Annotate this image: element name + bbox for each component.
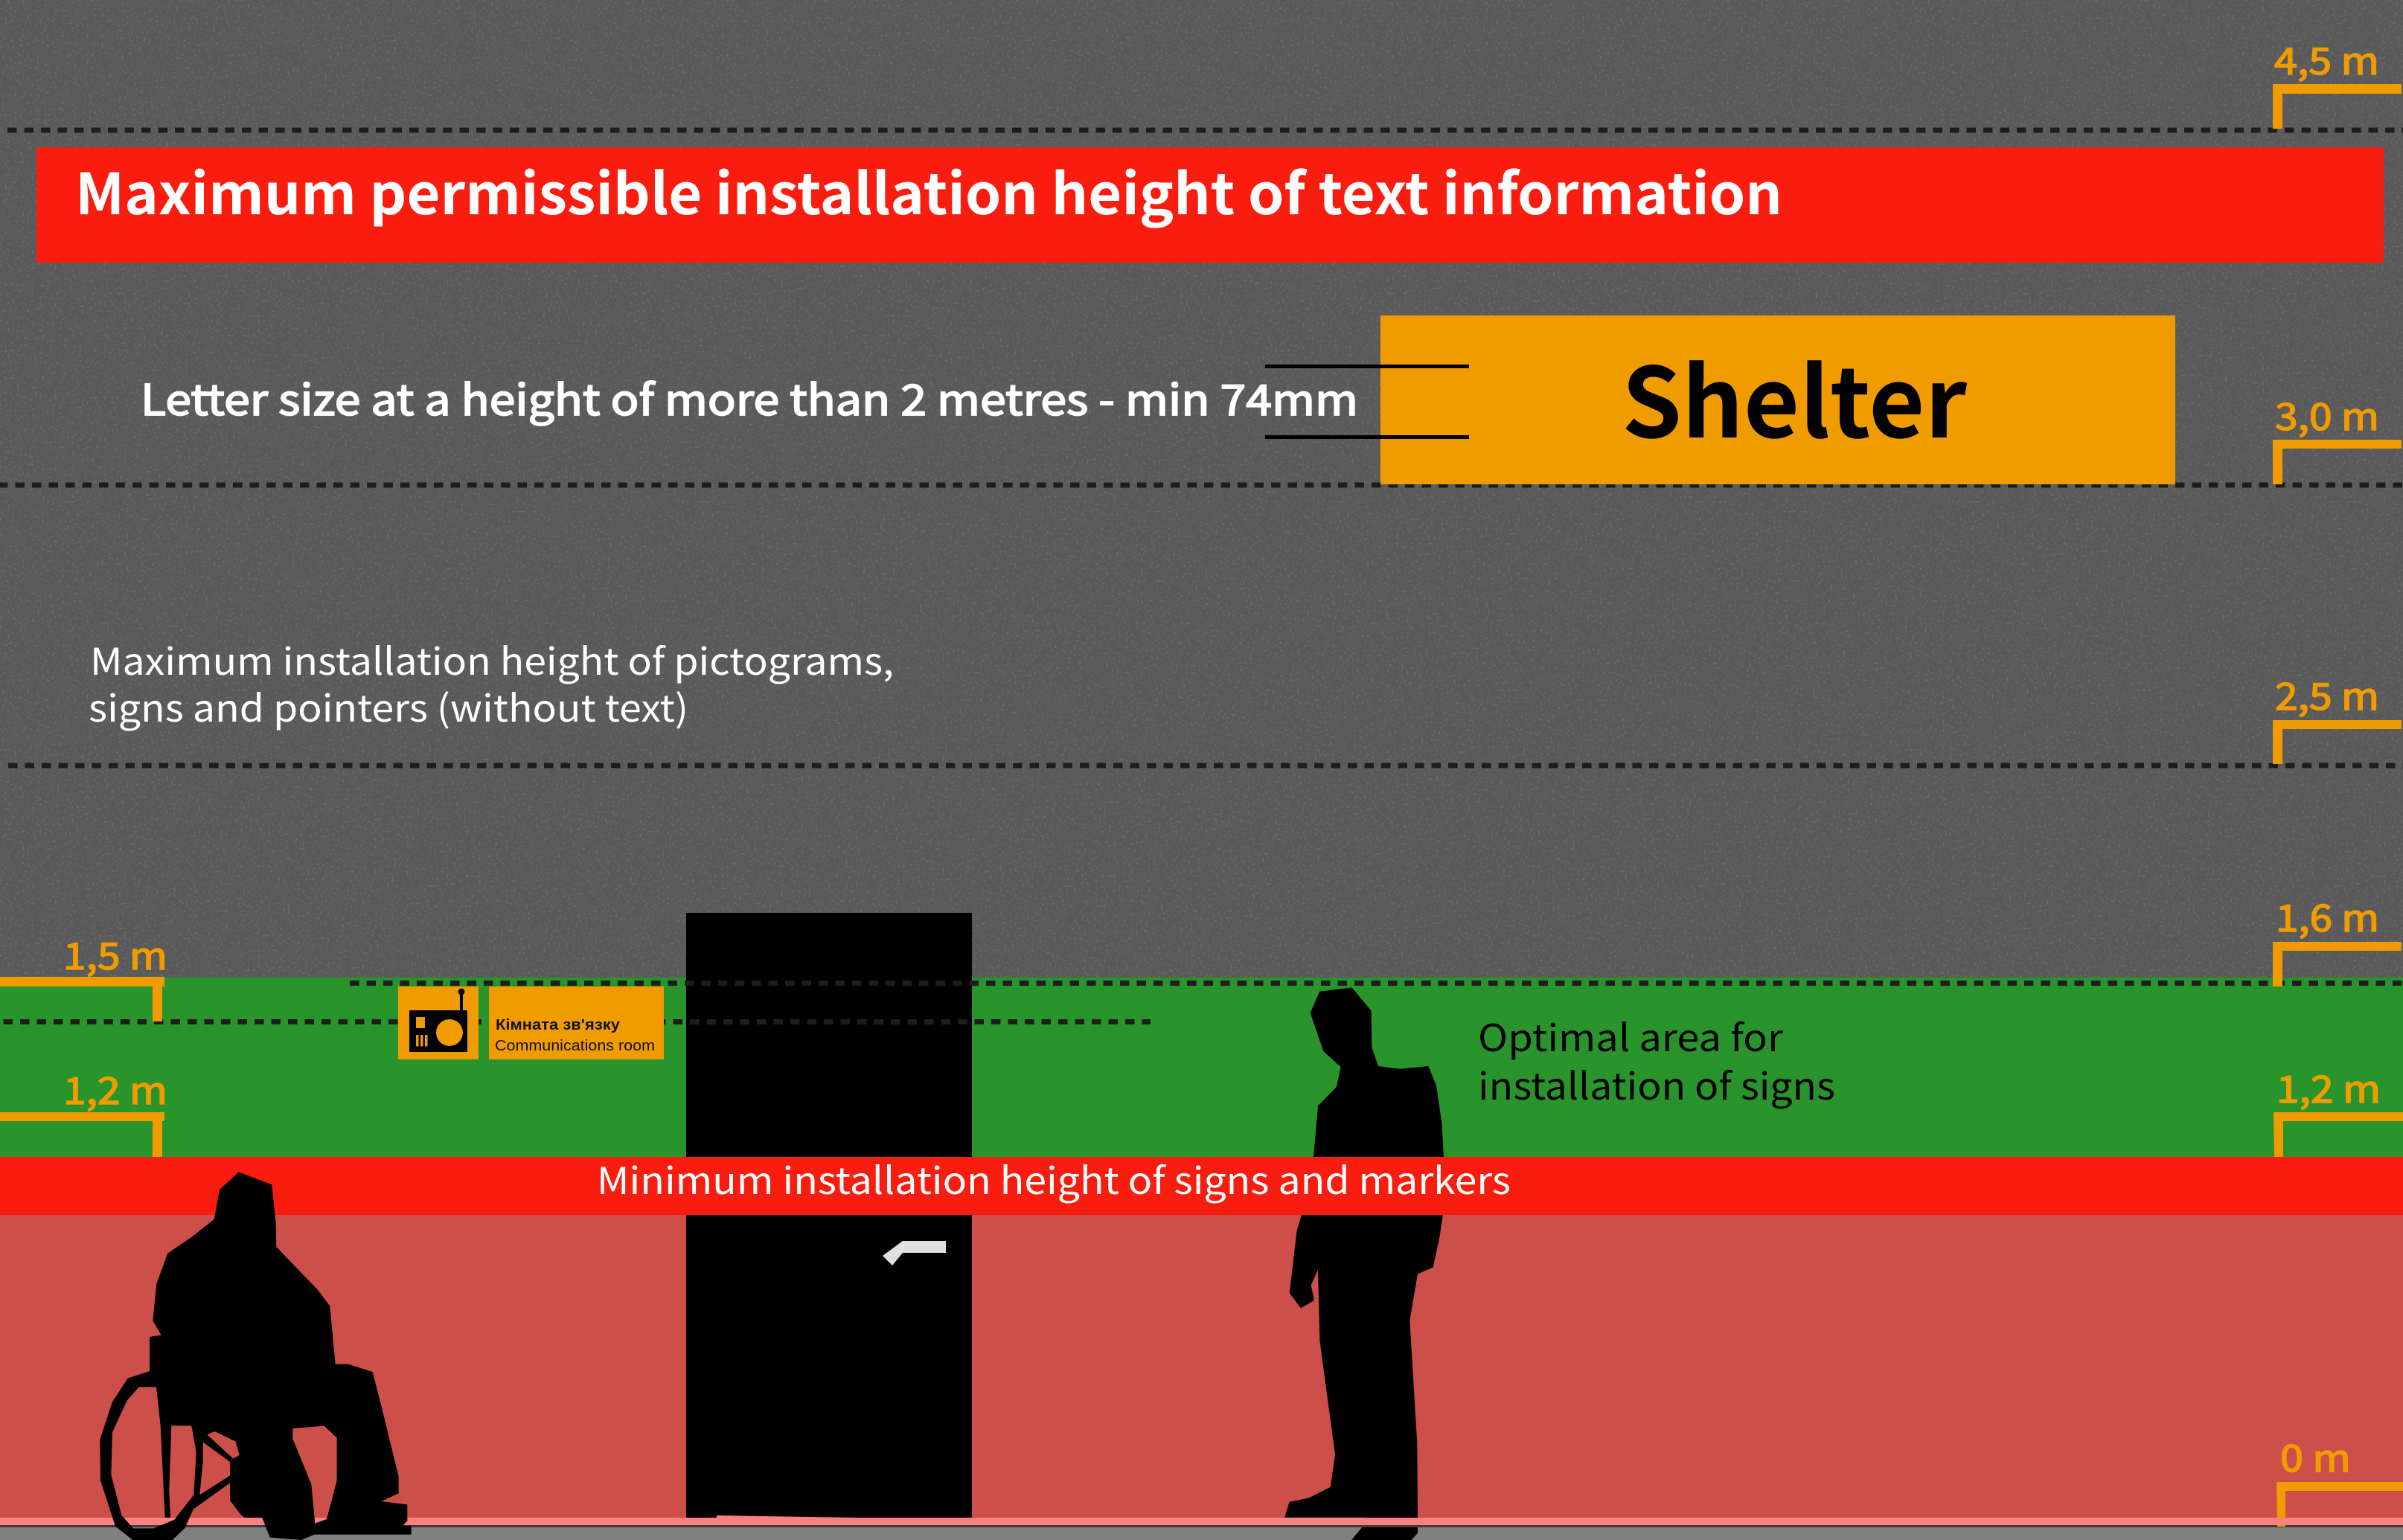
zone: optimal green area [0, 978, 2403, 1157]
height marker: 4,5 m [2273, 32, 2402, 129]
sign: Shelter [1380, 315, 2175, 484]
floor line: pink strip [0, 1518, 2403, 1527]
text: pictogram maximum height [89, 632, 894, 733]
height marker: 1,5 m left [0, 927, 167, 1021]
height marker: 1,6 m: 1,6 m [2276, 889, 2379, 943]
height marker: 1,6 m [2273, 889, 2402, 986]
door [686, 913, 972, 1518]
height marker: 1,5 m left: 1,5 m [63, 927, 167, 981]
text: pictogram maximum height: signs and pointers (without text) [89, 679, 688, 733]
text: letter size note: Letter size at a height of more than 2 metres - min 74mm [141, 367, 1358, 428]
icon: radio pictogram [398, 986, 479, 1059]
height marker: 1,2 m left: 1,2 m [63, 1062, 167, 1115]
height marker: 1,2 m right [2274, 1060, 2403, 1157]
height marker: 1,2 m left [0, 1062, 167, 1157]
sign: communications room label: Communications room [495, 1038, 655, 1054]
height marker: 3,0 m [2273, 388, 2402, 484]
height marker: 0 m [2276, 1429, 2403, 1527]
sign text: Shelter [1622, 326, 1967, 466]
height marker: 3,0 m: 3,0 m [2275, 388, 2379, 441]
dashed height lines [0, 130, 2403, 1022]
text: minimum installation height: Minimum installation height of signs and markers [597, 1152, 1511, 1205]
wheelchair user silhouette [100, 1172, 412, 1540]
height marker: 4,5 m: 4,5 m [2274, 32, 2379, 86]
sign: communications room label [489, 986, 664, 1059]
band: minimum installation height [0, 1157, 2403, 1215]
text: optimal area: Optimal area for [1478, 1009, 1784, 1062]
text: optimal area [1478, 1009, 1835, 1111]
sign: communications room label: Кімната зв'язку [496, 1017, 621, 1033]
title bar [36, 147, 2384, 263]
standing person silhouette [1284, 987, 1444, 1540]
floor: grey strip [0, 1525, 2403, 1540]
height marker: 2,5 m: 2,5 m [2275, 667, 2379, 721]
title: Maximum permissible installation height of text information [75, 149, 1782, 231]
text: optimal area: installation of signs [1478, 1057, 1835, 1111]
height marker: 1,2 m right: 1,2 m [2276, 1060, 2381, 1114]
zone: lower salmon area [0, 1215, 2403, 1518]
height marker: 0 m: 0 m [2280, 1429, 2351, 1483]
letter height guide lines [1265, 365, 1469, 439]
height marker: 2,5 m [2273, 667, 2402, 764]
text: pictogram maximum height: Maximum installation height of pictograms, [90, 632, 894, 686]
background: grey wall with grain [0, 0, 2403, 978]
door handle [883, 1241, 946, 1265]
